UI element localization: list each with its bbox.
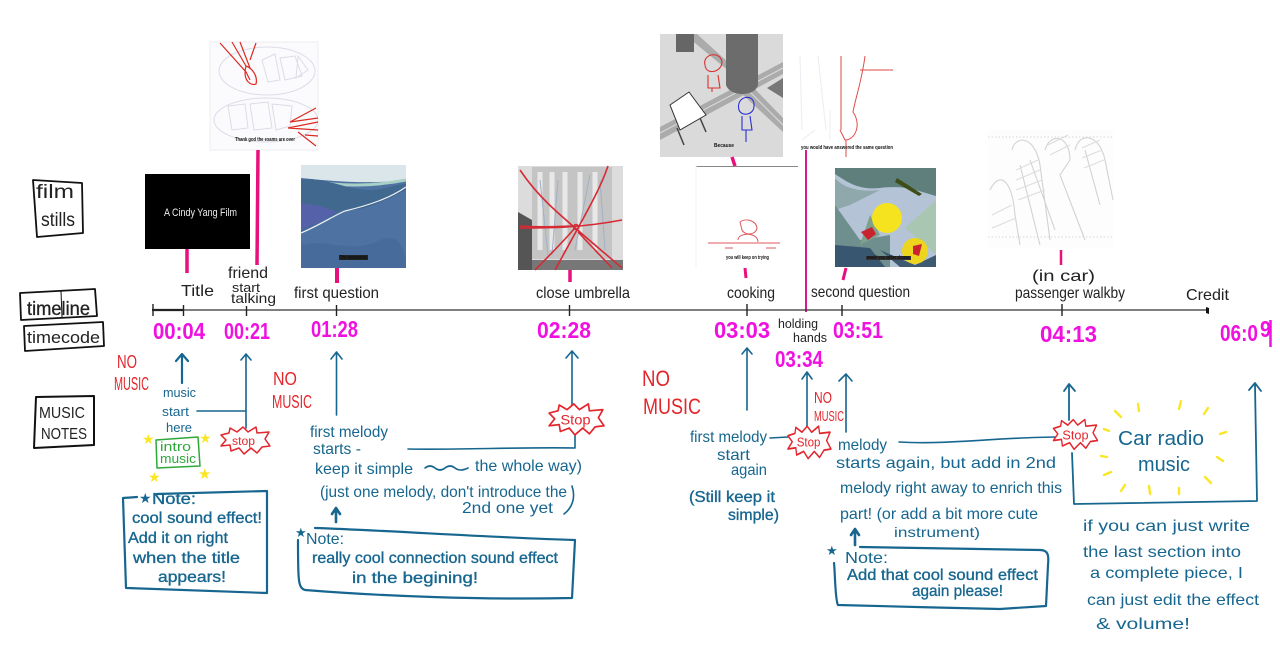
timecodes: [153, 316, 1271, 372]
film still: blue mountains: The mountains!: [340, 255, 367, 261]
note box 2: really cool connection sound effect: [312, 550, 559, 567]
note box 3: again please!: [912, 583, 1003, 600]
film still: blue mountains: [301, 165, 406, 268]
note box 2: [295, 525, 575, 599]
timeline event labels: close umbrella: [536, 285, 630, 302]
no music labels: NO: [273, 369, 297, 389]
film still: title card: A Cindy Yang Film: [164, 207, 237, 219]
film still: closing umbrella: [518, 166, 623, 270]
text: first melody start again: again: [731, 462, 767, 479]
text: first melody directions: keep it simple: [315, 461, 413, 478]
no music labels: NO: [814, 390, 832, 407]
text: first melody start again: simple): [728, 507, 779, 524]
text: melody starts again: instrument): [894, 524, 980, 540]
film still: cooking: [696, 166, 798, 268]
intro music box with stars: [142, 430, 212, 485]
film still: food plates: [210, 42, 318, 150]
note box 3: [826, 543, 1048, 609]
stop burst: [788, 426, 831, 459]
film still: grey street with characters: [660, 34, 783, 157]
timeline event labels: start: [232, 280, 260, 295]
text: melody starts again: melody right away to enrich this: [840, 480, 1062, 497]
film still: cooking: you will keep on trying: [726, 255, 769, 261]
intro music box with stars: ★: [198, 466, 211, 483]
text: music start here: [162, 385, 196, 435]
timeline event labels: Title: [181, 283, 214, 300]
film still: flowers: would you rather choose: [866, 255, 910, 261]
closing note: a complete piece, I: [1090, 565, 1243, 582]
text: melody starts again: part! (or add a bit more cute: [840, 506, 1038, 523]
arrow: music start: [176, 354, 188, 383]
closing note: [1083, 518, 1260, 633]
note box 2: in the begining!: [352, 570, 478, 587]
text: first melody directions: first melody: [310, 424, 388, 441]
timeline event labels: [181, 265, 1230, 345]
film still: title card: [145, 174, 250, 249]
row label: music notes: MUSIC: [39, 405, 85, 422]
timecodes: 00:21: [224, 318, 270, 344]
row label: timeline: timeline: [27, 299, 90, 320]
timeline event labels: passenger walkby: [1015, 285, 1125, 302]
stop burst: [1053, 420, 1098, 449]
text: first melody start again: [689, 429, 779, 524]
car radio music label: [1101, 401, 1226, 494]
row label: timeline: [20, 289, 97, 320]
timecodes: 04:13: [1040, 321, 1097, 347]
row label: music notes: [34, 396, 94, 448]
closing note: the last section into: [1083, 544, 1241, 561]
stop burst: [221, 427, 270, 454]
note box 2: ★: [295, 525, 307, 540]
intro music box with stars: intro: [160, 439, 191, 454]
text: music start here: here: [166, 420, 192, 435]
no music labels: NO: [642, 366, 670, 391]
stop burst: [549, 404, 604, 435]
row label: film stills: [33, 180, 83, 237]
row label: timecode: [24, 322, 104, 351]
closing note: if you can just write: [1083, 518, 1250, 535]
bracket with end arrow: [1072, 383, 1261, 504]
intro music box with stars: ★: [148, 469, 161, 485]
arrow: note pointer: [332, 508, 340, 522]
stop burst: Stop: [797, 436, 820, 450]
note box 3: Add that cool sound effect: [847, 567, 1039, 584]
text: music start here: start: [162, 404, 189, 419]
text: first melody directions: starts -: [313, 441, 361, 458]
timecodes: 9: [1260, 316, 1271, 342]
note box 2: Note:: [306, 531, 344, 548]
timeline event labels: (in car): [1032, 268, 1095, 285]
music section: first melody: [295, 351, 604, 599]
text: first melody directions: (just one melody, don't introduce the: [320, 484, 567, 501]
timeline event labels: talking: [231, 290, 276, 306]
car radio music label: music: [1138, 454, 1190, 476]
film still: car sketch: [988, 130, 1113, 248]
text: first melody directions: 2nd one yet: [462, 500, 554, 517]
note box 1: appears!: [158, 569, 226, 586]
row label: film stills: film: [36, 182, 74, 203]
no music labels: [114, 352, 844, 425]
note box 1: Add it on right: [128, 530, 229, 547]
timeline axis: [152, 304, 1209, 316]
music section: car radio: [1053, 383, 1261, 633]
intro music box with stars: ★: [199, 430, 212, 446]
connector lines from stills to timeline: [187, 150, 1061, 312]
note box 1: cool sound effect!: [132, 510, 262, 527]
timeline event labels: cooking: [727, 285, 775, 302]
music section: second melody: [826, 374, 1062, 609]
text: melody starts again: starts again, but add in 2nd: [836, 455, 1056, 472]
stop burst: Stop: [560, 412, 591, 428]
closing note: can just edit the effect: [1087, 592, 1260, 609]
text: first melody start again: start: [717, 447, 751, 464]
arrow: first melody stop: [408, 351, 578, 449]
timeline event labels: friend: [228, 265, 268, 282]
timeline event labels: second question: [811, 284, 910, 301]
text: melody starts again: melody: [838, 437, 887, 454]
note box 3: Note:: [845, 550, 888, 567]
music section: intro: [123, 354, 270, 593]
intro music box with stars: ★: [142, 431, 155, 447]
intro music box with stars: music: [160, 451, 197, 466]
text: music start here: music: [163, 385, 196, 400]
timecodes: 00:04: [153, 318, 205, 344]
film still: flowers: [835, 168, 936, 267]
no music labels: MUSIC: [272, 392, 312, 412]
text: first melody directions: the whole way): [475, 458, 582, 475]
film still: holding hands: [792, 55, 895, 158]
film still: grey street with characters: Because: [714, 143, 734, 149]
music section: melody restart: [689, 348, 831, 524]
stop burst: Stop: [1062, 427, 1089, 443]
closing note: & volume!: [1096, 616, 1190, 633]
timeline event labels: holding: [778, 316, 818, 331]
text: melody starts again: [836, 437, 1062, 540]
text: first melody start again: first melody: [690, 429, 767, 446]
timecodes: 03:34: [775, 346, 823, 372]
no music labels: MUSIC: [643, 394, 701, 419]
arrow: radio start: [1064, 384, 1075, 420]
no music labels: MUSIC: [114, 374, 149, 394]
text: first melody start again: (Still keep it: [689, 489, 776, 506]
row label: music notes: NOTES: [41, 426, 87, 443]
arrow: note pointer: [851, 529, 859, 545]
timeline event labels: hands: [793, 330, 827, 345]
note box 1: when the title: [132, 550, 240, 567]
car radio music label: Car radio: [1118, 428, 1204, 450]
stop burst: stop: [232, 434, 255, 448]
no music labels: NO: [117, 352, 137, 372]
no music labels: MUSIC: [814, 408, 844, 425]
film still: food plates: Thank god the exams are over: [235, 137, 295, 143]
timecodes: 03:03: [714, 317, 770, 343]
arrow: first melody start: [331, 352, 342, 415]
row label: film stills: stills: [41, 210, 75, 231]
film still: holding hands: you would have answered the same question: [801, 145, 893, 151]
timecodes: 01:28: [311, 316, 358, 342]
arrow: melody stop: [770, 372, 812, 438]
timeline event labels: first question: [294, 285, 379, 302]
note box 1: [123, 490, 267, 593]
line to stop: [899, 437, 1058, 443]
timecodes: 03:51: [833, 317, 883, 343]
note box 1: Note:: [152, 491, 196, 508]
arrow: melody restart: [742, 348, 752, 410]
note box 3: ★: [826, 543, 838, 558]
timecodes: 06:0: [1220, 320, 1258, 346]
timeline event labels: Credit: [1186, 287, 1230, 304]
arrow: second melody start: [839, 374, 852, 432]
timecodes: 02:28: [537, 317, 591, 343]
arrow: intro ends: [197, 354, 251, 428]
note box 1: ★: [139, 490, 152, 506]
row label: timecode: timecode: [27, 328, 100, 347]
text: first melody directions: [310, 424, 582, 517]
